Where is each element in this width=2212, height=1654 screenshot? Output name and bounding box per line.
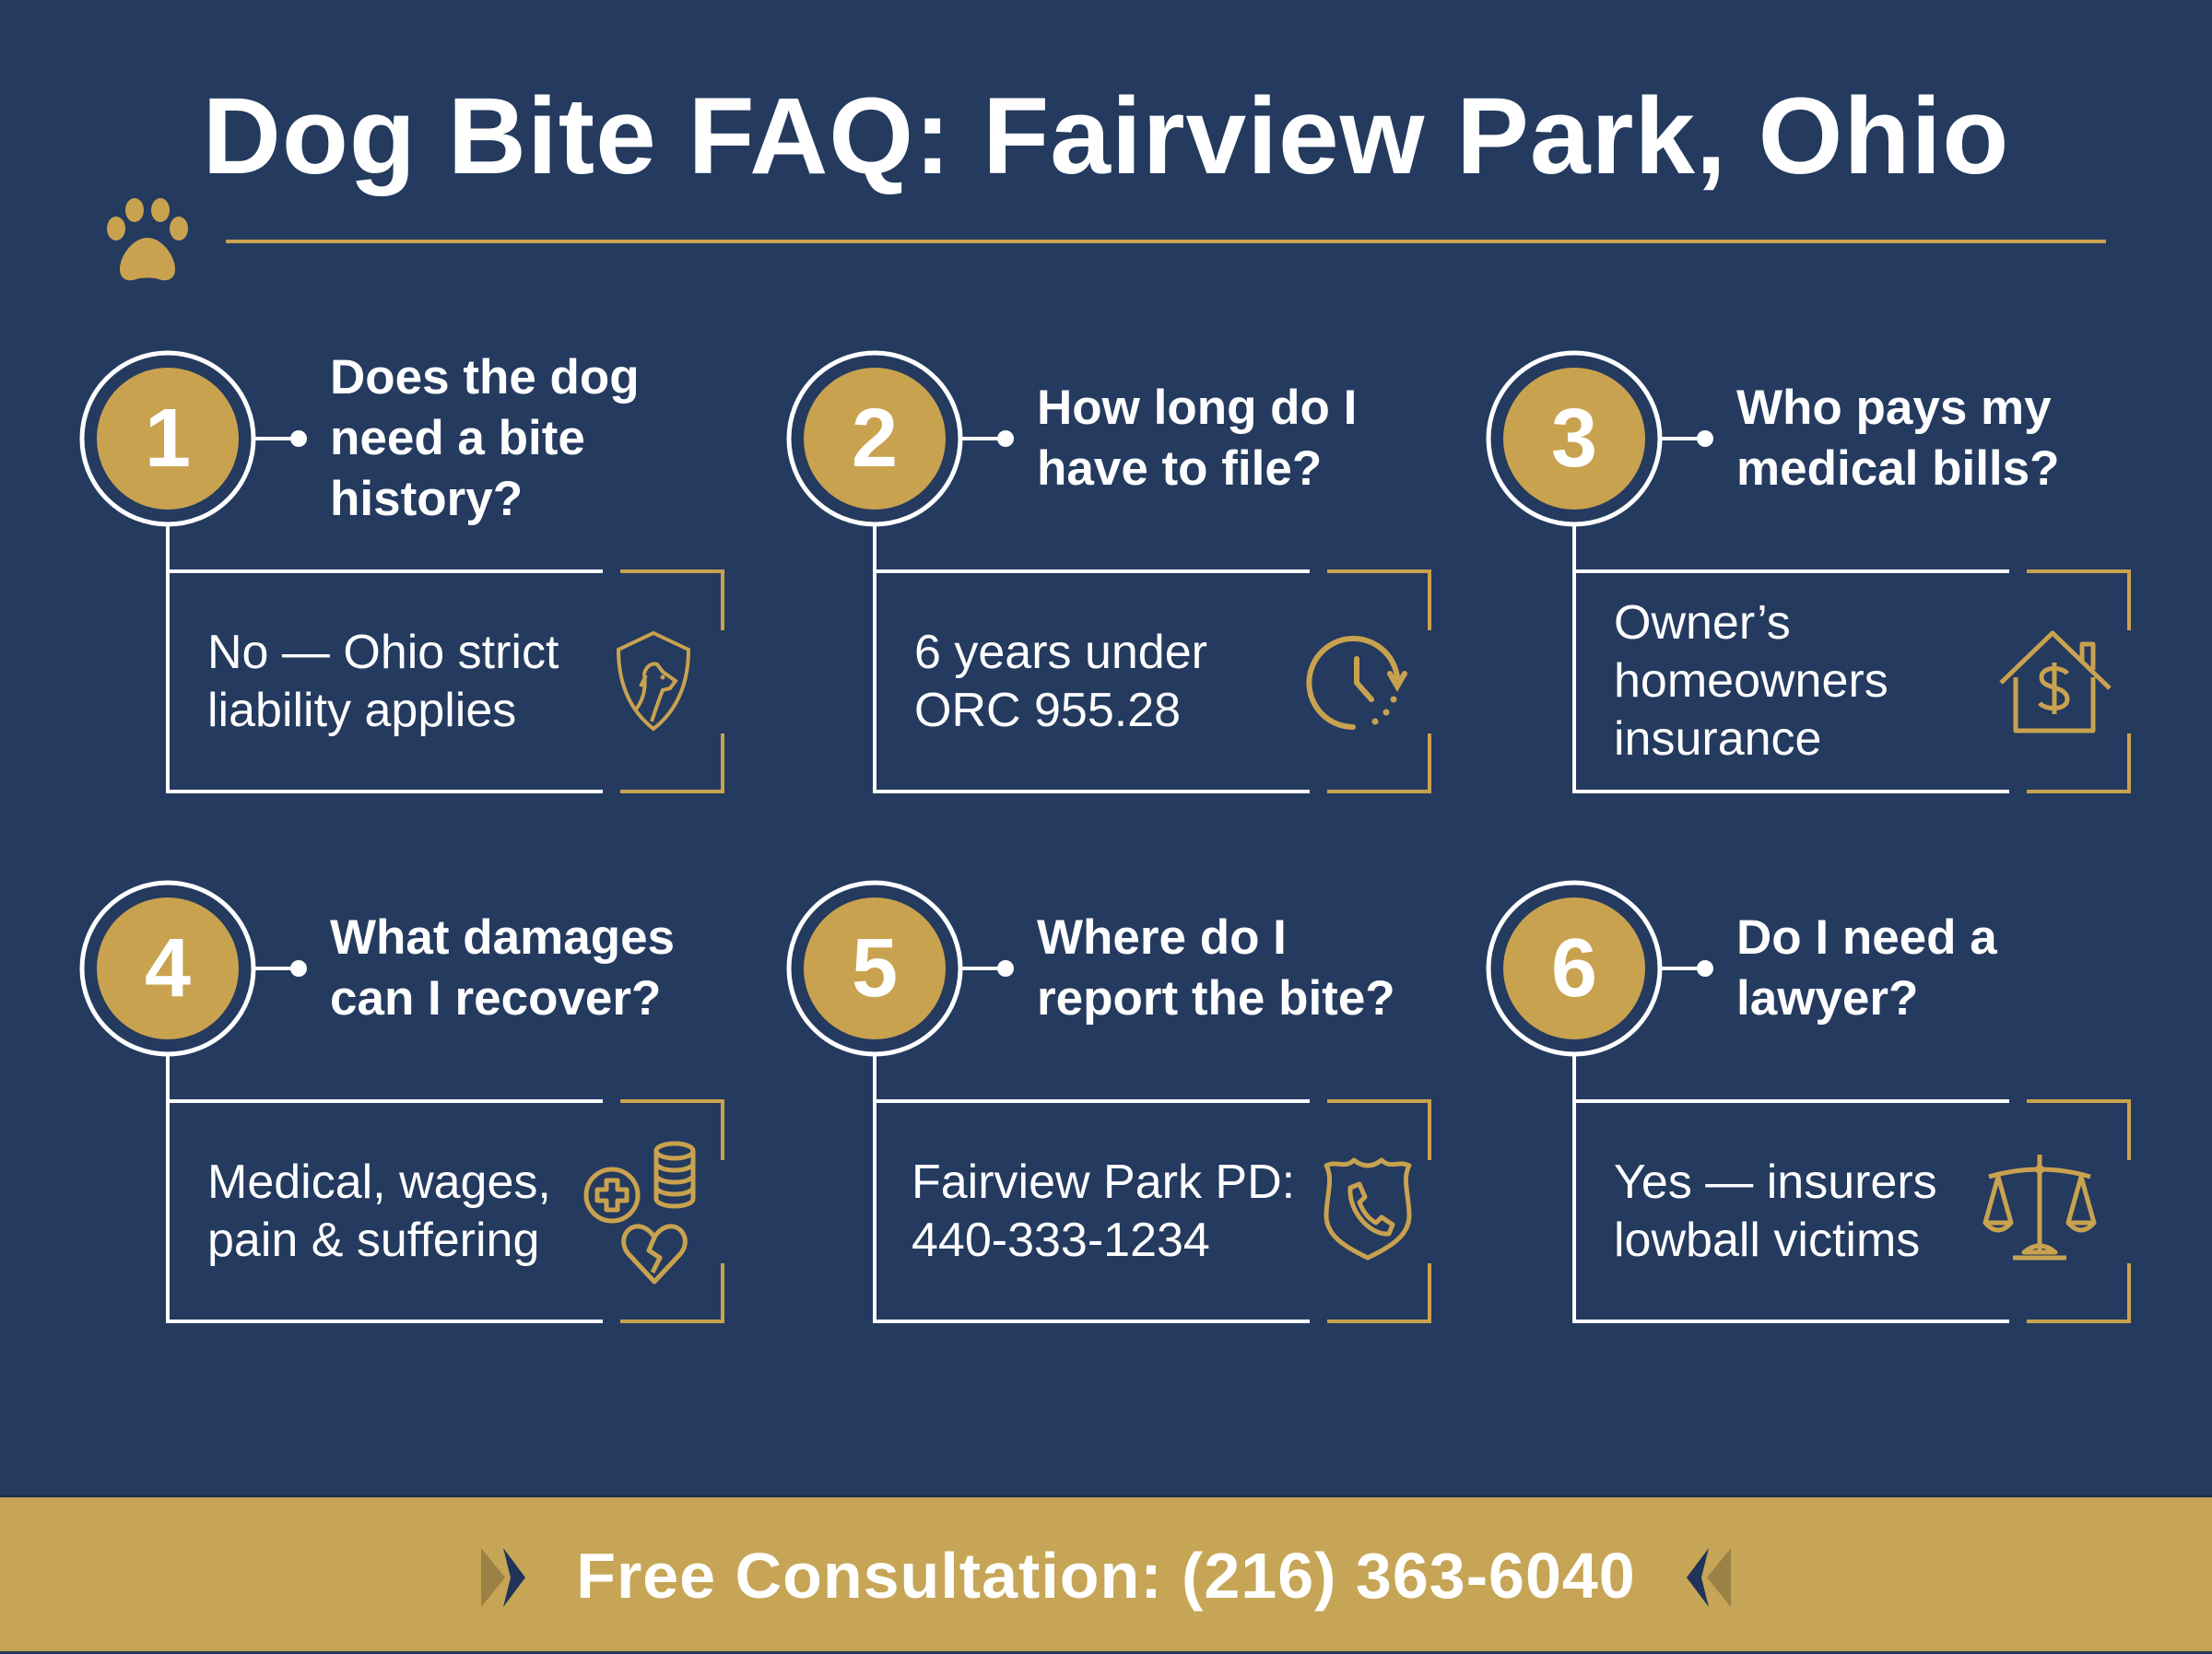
number 2: 2 [852,393,898,485]
chevron left [481,1548,525,1607]
question 1 [330,350,640,526]
question 1: Does the dog [330,350,640,405]
card 2 [787,350,1431,793]
answer 3: Owner’s [1614,596,1791,650]
icon: police badge with phone [1324,1157,1412,1261]
question 5: report the bite? [1037,971,1395,1026]
answer 4: pain & suffering [207,1213,539,1266]
icon: medical, coins, broken heart [584,1141,695,1284]
answer 3: insurance [1614,712,1821,766]
card 6 [1486,881,2131,1323]
divider line [226,240,2106,243]
number 6: 6 [1551,921,1597,1014]
answer 1: liability applies [207,684,516,737]
answer 4 [207,1155,551,1266]
answer 3 [1614,596,1888,766]
answer 4: Medical, wages, [207,1155,551,1209]
question 6: lawyer? [1736,971,1918,1026]
question 3: Who pays my [1736,381,2052,435]
number 4: 4 [145,921,191,1014]
answer 2 [914,625,1207,737]
icon: clock [1306,636,1407,730]
number 1: 1 [145,393,191,485]
question 1: need a bite [330,411,585,465]
answer 5 [912,1155,1295,1266]
footer text: Free Consultation: (216) 363-6040 [576,1540,1636,1612]
answer 6: lowball victims [1614,1213,1920,1266]
icon: house with dollar [1999,630,2112,733]
card 4 [79,881,724,1323]
question 2: How long do I [1037,381,1357,435]
answer 1 [207,625,559,737]
question 3: medical bills? [1736,441,2060,496]
question 2: have to file? [1037,441,1322,496]
question 4: What damages [330,910,675,965]
footer banner [0,1495,2212,1651]
question 3 [1736,381,2060,496]
question 5: Where do I [1037,910,1287,965]
question 4: can I recover? [330,971,661,1026]
answer 2: ORC 955.28 [914,684,1181,737]
answer 1: No — Ohio strict [207,625,559,678]
card 3 [1486,350,2131,793]
question 6: Do I need a [1736,910,1997,965]
icon: paw [107,198,188,280]
chevron right [1687,1548,1731,1607]
answer 6: Yes — insurers [1614,1155,1937,1209]
icon: shield with dog [617,630,690,732]
title: Dog Bite FAQ: Fairview Park, Ohio [203,76,2009,197]
card 1 [79,350,724,793]
answer 5: 440-333-1234 [912,1213,1210,1266]
answer 6 [1614,1155,1937,1266]
answer 2: 6 years under [914,625,1207,678]
answer 5: Fairview Park PD: [912,1155,1295,1209]
question 4 [330,910,675,1026]
question 1: history? [330,472,523,526]
question 5 [1037,910,1395,1026]
answer 3: homeowners [1614,654,1888,708]
card 5 [787,881,1431,1323]
number 3: 3 [1551,393,1597,485]
question 2 [1037,381,1357,496]
number 5: 5 [852,921,898,1014]
icon: scales of justice [1983,1155,2096,1261]
question 6 [1736,910,1998,1026]
